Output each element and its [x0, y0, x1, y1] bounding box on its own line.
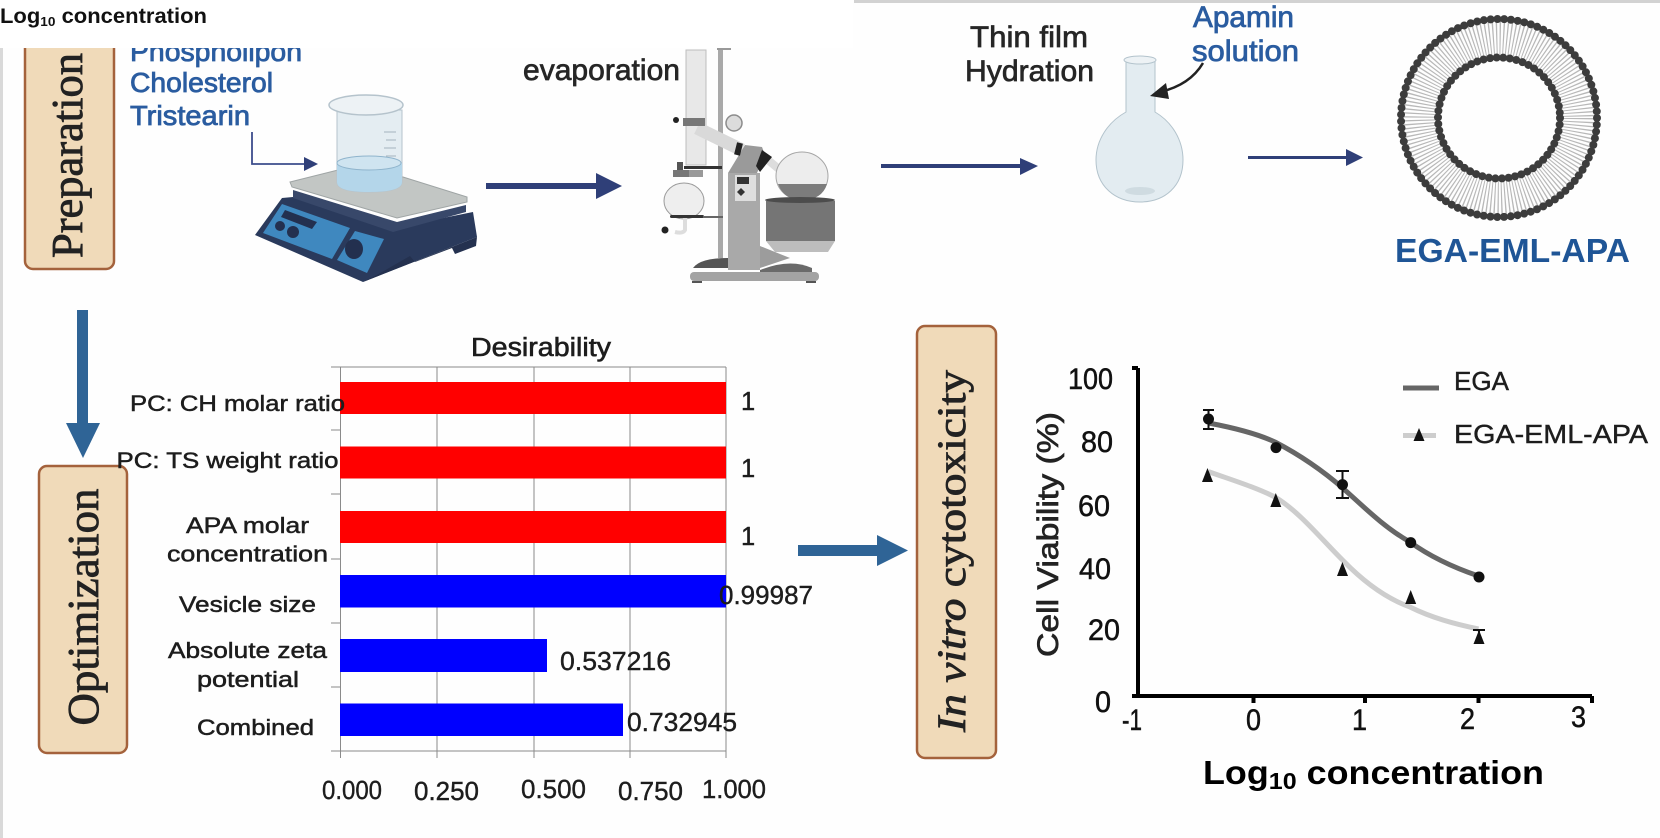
legend: EGA-EML-APA: [1454, 421, 1648, 449]
text: apamin solution: [1192, 1, 1299, 68]
arrow: optimization to cytotoxicity: [798, 535, 908, 566]
x axis labels: 0.000: [322, 777, 382, 805]
icon: round bottom flask: [1096, 56, 1183, 202]
x tick labels: 3: [1571, 701, 1586, 734]
bar values: 1: [741, 455, 755, 483]
x tick labels: -1: [1122, 704, 1142, 737]
text: stray axis caption at top left: 10: [40, 14, 55, 29]
y tick labels: 20: [1088, 614, 1120, 647]
text: thin film hydration: [965, 21, 1094, 88]
arrow: ingredients to beaker: [252, 132, 318, 171]
panel: in vitro cytotoxicity label: In vitro cytotoxicity: [929, 370, 974, 733]
text: stray axis caption at top left: concentration: [55, 5, 207, 28]
y tick labels: 80: [1081, 426, 1113, 459]
y tick labels: 100: [1068, 363, 1113, 396]
category labels: Absolute zeta: [168, 638, 328, 663]
y tick labels: 40: [1079, 553, 1111, 586]
icon: magnetic stirrer hot plate with beaker: [255, 95, 477, 282]
curve: EGA: [1203, 410, 1484, 582]
x axis labels: 0.500: [521, 776, 586, 804]
bar values: 0.99987: [719, 582, 813, 610]
x axis labels: [322, 776, 766, 806]
text block: lipid ingredients: Tristearin: [130, 100, 250, 131]
arrow: evaporator to flask: [881, 158, 1038, 175]
panel: preparation label: Preparation: [43, 53, 92, 258]
x axis labels: 0.250: [414, 778, 479, 806]
y tick labels: 0: [1095, 686, 1111, 719]
axes: [1132, 368, 1592, 703]
x axis title: concentration: [1297, 754, 1544, 791]
panel: optimization label: Optimization: [59, 488, 108, 726]
icon: rotary evaporator: [662, 48, 835, 283]
y tick labels: [1068, 363, 1120, 719]
panel: preparation label: [25, 30, 114, 269]
text: EGA-EML-APA product label: EGA-EML-APA: [1395, 232, 1630, 269]
x tick labels: 1: [1352, 704, 1367, 737]
bar values: 1: [741, 523, 755, 551]
panel: optimization label: [39, 466, 127, 753]
panel: in vitro cytotoxicity label: [917, 326, 996, 758]
chart title: Desirability: [471, 334, 611, 362]
arrow: stirrer to rotary evaporator: [486, 173, 622, 199]
text: apamin solution: solution: [1192, 35, 1299, 68]
text block: lipid ingredients: Cholesterol: [130, 67, 273, 98]
x axis title: Log: [1203, 754, 1263, 791]
category labels: [116, 391, 345, 740]
category labels: APA molar: [186, 513, 310, 538]
red bars: [340, 382, 726, 543]
x axis labels: 0.750: [618, 778, 683, 806]
x tick labels: [1122, 701, 1586, 737]
text: thin film hydration: Thin film: [970, 21, 1088, 54]
legend: [1403, 368, 1648, 449]
text: evaporation: evaporation: [523, 54, 680, 87]
white mask band across top: [0, 0, 853, 48]
bar chart: desirability: [116, 334, 813, 806]
text: apamin solution: Apamin: [1193, 1, 1294, 34]
blue bars: [340, 575, 726, 736]
x tick labels: 2: [1460, 703, 1475, 736]
arrow: flask to liposome: [1248, 149, 1363, 166]
x tick labels: 0: [1246, 704, 1261, 737]
arrow: preparation to optimization: [66, 310, 100, 458]
y tick labels: 60: [1078, 490, 1110, 523]
x axis labels: 1.000: [702, 776, 766, 804]
icon: liposome bilayer: [1401, 19, 1597, 217]
y axis title: Cell Viability (%): [1032, 412, 1065, 657]
bar values: 0.732945: [627, 709, 737, 737]
legend: EGA: [1454, 368, 1509, 396]
line chart: cell viability: [1032, 363, 1648, 794]
category labels: PC: TS weight ratio: [116, 448, 338, 473]
text block: lipid ingredients: [130, 36, 302, 131]
bar values: 0.537216: [560, 648, 671, 676]
arrow: apamin into flask: [1150, 63, 1203, 99]
category labels: potential: [197, 667, 299, 692]
text block: lipid ingredients: Phospholipon: [130, 36, 302, 67]
category labels: PC: CH molar ratio: [130, 391, 345, 416]
text: thin film hydration: Hydration: [965, 55, 1094, 88]
category labels: Vesicle size: [179, 592, 316, 617]
curve: EGA-EML-APA: [1202, 468, 1485, 644]
bar values: 1: [741, 388, 755, 416]
x axis title: 10: [1269, 768, 1297, 794]
text: stray axis caption at top left: Log: [0, 5, 38, 28]
bar values: [560, 388, 813, 737]
category labels: concentration: [167, 542, 328, 566]
category labels: Combined: [197, 715, 314, 740]
